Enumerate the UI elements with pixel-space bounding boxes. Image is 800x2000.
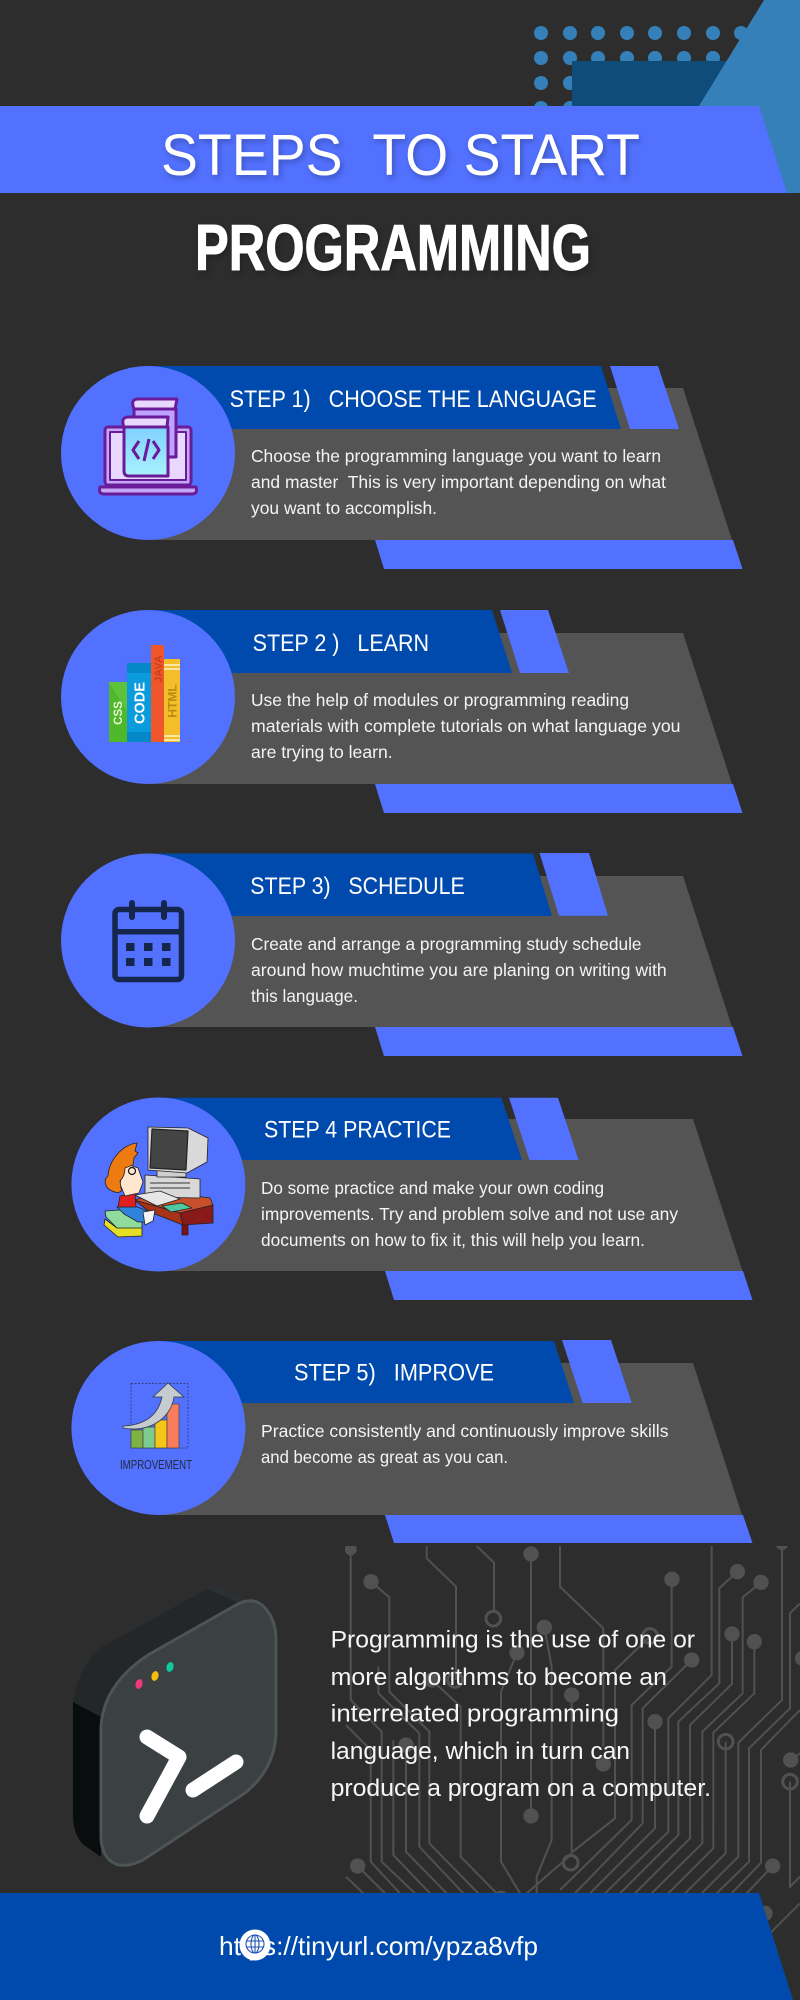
text: step 5: and become as great as you can. [261, 1447, 508, 1467]
text: step 1 [251, 446, 666, 518]
heading: step 5: STEP 5) IMPROVE [294, 1360, 494, 1387]
text: step 5 [261, 1421, 669, 1467]
heading: step 4: STEP 4 PRACTICE [264, 1117, 451, 1144]
footer url: https://tinyurl.com/ypza8vfp [219, 1931, 538, 1961]
panel: step 1 [61, 366, 742, 569]
icon: improvement chart: IMPROVEMENT [120, 1457, 192, 1472]
text: step 4: Do some practice and make your own coding [261, 1178, 604, 1198]
text: step 4: documents on how to fix it, this will help you learn. [261, 1230, 645, 1250]
icon: coding books [109, 645, 180, 742]
text: step 1: Choose the programming language you want to learn [251, 446, 661, 466]
decoration: circuit board pattern [345, 1537, 800, 1938]
text: step 5: Practice consistently and continuously improve skills [261, 1421, 669, 1441]
text: programming definition [331, 1627, 711, 1802]
icon: coding books: CSS [113, 701, 125, 725]
heading: step 1: STEP 1) CHOOSE THE LANGUAGE [230, 386, 597, 413]
heading: step 3: STEP 3) SCHEDULE [250, 873, 465, 900]
icon: laptop and code books [100, 399, 196, 494]
footer bar [0, 1893, 793, 2000]
text: step 2: are trying to learn. [251, 742, 393, 762]
icon: globe [240, 1930, 270, 1960]
heading: step 2: STEP 2 ) LEARN [253, 630, 429, 657]
icon: improvement chart [120, 1383, 192, 1472]
icon: terminal app [73, 1585, 276, 1865]
text: step 1: and master This is very important depending on what [251, 472, 666, 492]
text: step 3: around how muchtime you are planing on writing with [251, 960, 667, 980]
title: steps to start: STEPS TO START [161, 123, 640, 188]
icon: coding books: JAVA [153, 655, 165, 683]
panel: step 5 [71, 1340, 752, 1543]
text: programming definition: language, which in turn can [331, 1738, 630, 1765]
text: step 3: this language. [251, 986, 358, 1006]
text: step 1: you want to accomplish. [251, 498, 437, 518]
text: programming definition: produce a program on a computer. [331, 1775, 711, 1802]
icon: coding books: CODE [132, 682, 148, 724]
title: programming: PROGRAMMING [195, 211, 591, 284]
title banner [0, 106, 787, 193]
decoration: top right dots and shapes [534, 0, 800, 193]
text: step 2: Use the help of modules or programming reading [251, 690, 629, 710]
text: step 3: Create and arrange a programming study schedule [251, 934, 642, 954]
panel: step 4 [71, 1098, 752, 1300]
text: step 2 [251, 690, 680, 762]
text: programming definition: more algorithms to become an [331, 1664, 667, 1691]
panel: step 2 [61, 610, 742, 813]
icon: coding books: HTML [166, 684, 180, 718]
text: step 3 [251, 934, 667, 1006]
icon: calendar [114, 900, 183, 980]
text: programming definition: Programming is the use of one or [331, 1627, 695, 1654]
text: step 4: improvements. Try and problem solve and not use any [261, 1204, 678, 1224]
text: step 2: materials with complete tutorials on what language you [251, 716, 680, 736]
text: step 4 [261, 1178, 678, 1250]
panel: step 3 [61, 853, 742, 1056]
text: programming definition: interrelated programming [331, 1701, 619, 1728]
icon: boy at computer [104, 1127, 213, 1237]
